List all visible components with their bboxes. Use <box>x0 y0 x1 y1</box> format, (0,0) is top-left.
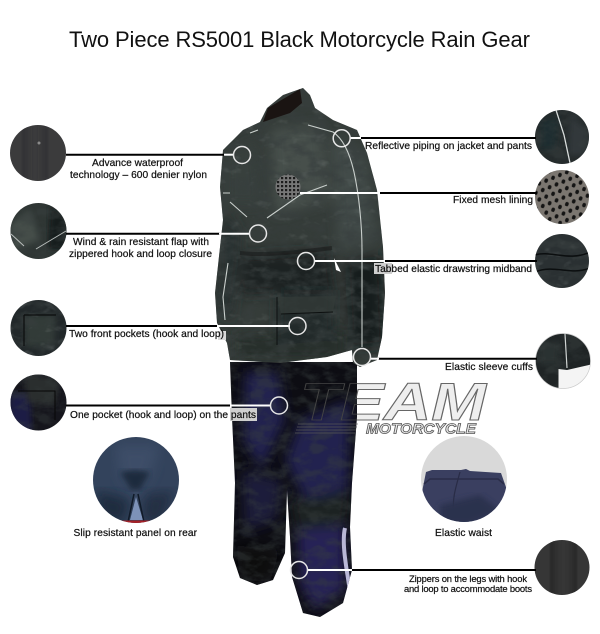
collar lining <box>263 89 302 122</box>
thumbnail: midband <box>535 234 589 288</box>
title: Two Piece RS5001 Black Motorcycle Rain Gear <box>69 27 530 52</box>
logo: Team Motorcycle, light layer: TEAM <box>300 373 488 432</box>
jacket pocket flap <box>278 296 334 314</box>
thumbnail: zipper <box>534 540 590 595</box>
logo overlay on pants: TEAM <box>300 373 488 432</box>
logo: Team Motorcycle, light layer: MOTORCYCLE <box>366 420 477 438</box>
thumbnail: nylon <box>10 125 66 181</box>
callout: reflective piping: Reflective piping on jacket and pants <box>365 141 532 152</box>
thumbnail: rear panel <box>93 437 179 523</box>
callout: sleeve cuffs: Elastic sleeve cuffs <box>445 362 533 373</box>
callout: waterproof nylon <box>8 123 250 183</box>
callout: front pockets: Two front pockets (hook and loop) <box>69 329 224 340</box>
callout: reflective piping <box>333 108 591 166</box>
thumbnail: waist <box>419 434 509 525</box>
thumbnail: cuff <box>536 334 590 388</box>
reflective leg stripe <box>344 528 350 592</box>
callout: leg zippers: and loop to accommodate boots <box>404 583 532 594</box>
reflective piping <box>223 125 362 347</box>
thumbnail: flap <box>10 203 66 259</box>
callout: drawstring midband <box>298 232 591 290</box>
callout: slip resistant panel: Slip resistant panel on rear <box>74 528 198 539</box>
callout: elastic waist: Elastic waist <box>435 528 492 539</box>
thumbnail: mesh <box>535 170 589 224</box>
callout: sleeve cuffs <box>354 331 593 391</box>
pants <box>230 362 357 617</box>
callout: pants pocket <box>10 374 288 430</box>
callout: wind and rain flap <box>8 200 266 262</box>
mesh vent <box>276 174 300 200</box>
callout: leg zippers <box>290 538 593 598</box>
jacket <box>210 85 390 370</box>
callout: elastic waist <box>419 434 509 539</box>
callout: waterproof nylon: technology – 600 denier nylon <box>70 170 207 181</box>
thumbnail: pocket <box>10 300 66 356</box>
callout: waterproof nylon: Advance waterproof <box>92 158 183 169</box>
callout: mesh lining <box>300 168 591 226</box>
callout: slip resistant panel <box>74 435 198 539</box>
callout: mesh lining: Fixed mesh lining <box>453 195 533 206</box>
callout: wind and rain flap: zippered hook and loop closure <box>69 249 212 260</box>
thumbnail: piping <box>535 110 589 164</box>
callout: drawstring midband: Tabbed elastic drawstring midband <box>375 264 532 275</box>
midband <box>240 248 332 254</box>
callout: wind and rain flap: Wind & rain resistant flap with <box>73 237 209 248</box>
callout: front pockets <box>10 300 307 356</box>
thumbnail: pants pocket <box>10 374 66 430</box>
callout: leg zippers: Zippers on the legs with hook <box>409 573 527 584</box>
callout: pants pocket: One pocket (hook and loop) on the pants <box>70 410 256 421</box>
